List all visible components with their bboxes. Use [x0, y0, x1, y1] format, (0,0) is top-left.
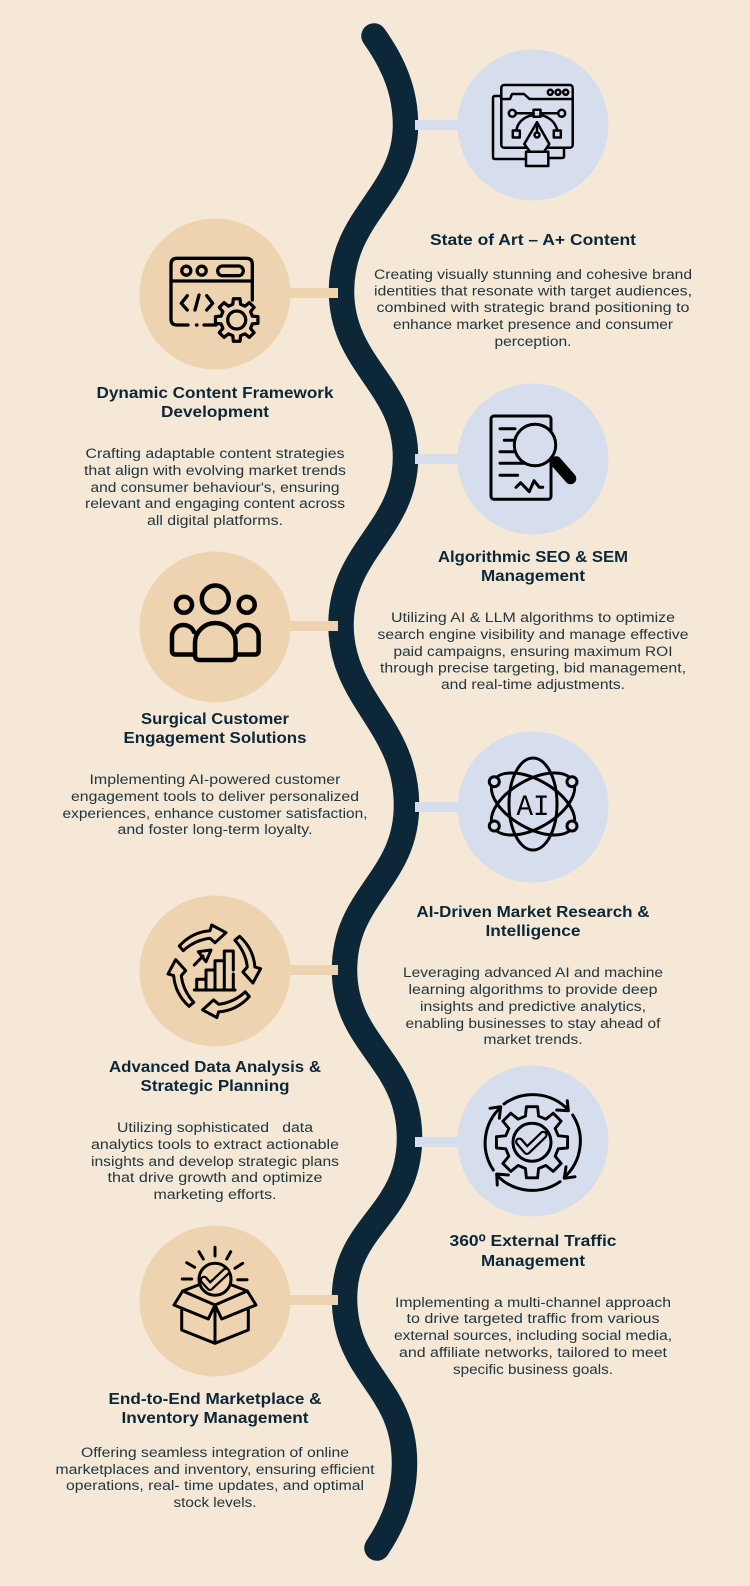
icon circle	[140, 552, 290, 702]
heading: Inventory Management	[122, 1410, 308, 1427]
body text: paid campaigns, ensuring maximum ROI	[394, 644, 672, 659]
body text: learning algorithms to provide deep	[408, 982, 658, 997]
heading: Management	[481, 1253, 585, 1270]
body text: to drive targeted traffic from various	[406, 1311, 660, 1326]
icon: gear with check and cycle arrows	[485, 1095, 580, 1190]
heading: Engagement Solutions	[124, 730, 306, 747]
heading: Management	[481, 568, 585, 585]
body text: Offering seamless integration of online	[81, 1445, 349, 1460]
body text: Utilizing sophisticated data	[117, 1120, 314, 1135]
heading: Advanced Data Analysis &	[109, 1059, 321, 1076]
body text: enabling businesses to stay ahead of	[406, 1016, 661, 1031]
heading: State of Art – A+ Content	[430, 232, 636, 249]
body text: and foster long-term loyalty.	[118, 822, 312, 837]
panel: Surgical Customer Engagement	[62, 552, 368, 837]
panel: Algorithmic SEO and SEM	[378, 384, 688, 692]
connector	[289, 621, 338, 631]
heading: Development	[161, 404, 269, 421]
panel: Advanced Data Analysis	[91, 896, 339, 1202]
connector	[415, 802, 459, 812]
heading	[438, 549, 628, 585]
body text: Leveraging advanced AI and machine	[403, 965, 663, 980]
icon: open box with check badge	[174, 1247, 256, 1343]
body text: Utilizing AI & LLM algorithms to optimize	[391, 610, 675, 625]
body text: that align with evolving market trends	[84, 463, 346, 478]
connector	[415, 454, 459, 464]
body text: Implementing AI-powered customer	[90, 772, 341, 787]
heading	[450, 1233, 617, 1270]
icon circle	[458, 732, 608, 882]
body text: perception.	[494, 334, 572, 349]
connector	[415, 1137, 459, 1147]
heading: End-to-End Marketplace &	[108, 1391, 322, 1408]
body text: and affiliate networks, tailored to meet	[399, 1345, 667, 1360]
body text: all digital platforms.	[147, 513, 283, 528]
body text	[394, 1295, 672, 1377]
body text	[378, 610, 688, 692]
icon: AI atom	[481, 758, 585, 850]
heading: 360⁰ External Traffic	[450, 1233, 617, 1250]
heading: Surgical Customer	[141, 711, 289, 728]
heading	[124, 711, 306, 747]
icon: AI atom: AI	[516, 791, 550, 825]
body text: search engine visibility and manage effective	[378, 627, 688, 642]
icon: group of people	[172, 586, 259, 660]
connector	[289, 288, 338, 298]
body text: and real-time adjustments.	[441, 677, 625, 692]
body text: Creating visually stunning and cohesive brand	[374, 267, 692, 282]
body text: that drive growth and optimize	[108, 1170, 322, 1185]
body text	[91, 1120, 339, 1202]
body text	[84, 446, 346, 528]
panel: Dynamic Content Framework	[84, 218, 346, 528]
heading: Algorithmic SEO & SEM	[438, 549, 628, 566]
icon circle	[140, 896, 290, 1046]
body text: enhance market presence and consumer	[393, 317, 674, 332]
body text: stock levels.	[174, 1495, 256, 1510]
connector	[289, 965, 338, 975]
icon circle	[140, 1226, 290, 1376]
timeline wave	[341, 36, 410, 1548]
body text: marketplaces and inventory, ensuring efficient	[56, 1462, 375, 1477]
body text: operations, real- time updates, and optimal	[66, 1478, 364, 1493]
panel: End-to-End Marketplace	[56, 1226, 375, 1510]
body text	[56, 1445, 375, 1510]
icon circle	[140, 218, 290, 370]
panel: AI-Driven Market Research	[403, 732, 663, 1047]
body text	[374, 267, 692, 349]
icon: growth chart with cycle arrows	[168, 925, 261, 1018]
heading: AI-Driven Market Research &	[416, 904, 650, 921]
icon: document with magnifier	[491, 416, 570, 499]
heading: Dynamic Content Framework	[96, 385, 334, 402]
heading: Strategic Planning	[140, 1078, 290, 1095]
icon: design window with pen tool	[493, 85, 573, 166]
body text: and consumer behaviour's, ensuring	[90, 480, 340, 495]
body text: insights and develop strategic plans	[91, 1154, 339, 1169]
body text	[62, 772, 368, 837]
heading	[109, 1059, 321, 1095]
heading	[416, 904, 650, 940]
body text: insights and predictive analytics,	[420, 999, 646, 1014]
icon circle	[458, 50, 608, 200]
body text: marketing efforts.	[154, 1187, 276, 1202]
icon circle	[458, 1066, 608, 1216]
connector	[289, 1295, 338, 1305]
body text: market trends.	[484, 1032, 582, 1047]
body text: relevant and engaging content across	[85, 496, 345, 511]
body text: analytics tools to extract actionable	[91, 1137, 339, 1152]
panel: 360 External Traffic	[394, 1066, 672, 1377]
panel: State of Art	[374, 50, 692, 349]
body text: specific business goals.	[453, 1362, 613, 1377]
icon circle	[458, 384, 608, 534]
body text: combined with strategic brand positioning to	[376, 300, 690, 315]
connector	[415, 120, 459, 130]
body text: through precise targeting, bid management,	[380, 660, 686, 676]
icon: code window with gear	[171, 258, 258, 341]
body text	[403, 965, 663, 1047]
body text: engagement tools to deliver personalized	[71, 789, 359, 804]
body text: experiences, enhance customer satisfaction,	[62, 806, 368, 821]
body text: Crafting adaptable content strategies	[86, 446, 345, 461]
heading	[108, 1391, 322, 1427]
body text: identities that resonate with target audiences,	[374, 284, 692, 298]
body text: external sources, including social media,	[394, 1328, 672, 1343]
heading: Intelligence	[486, 923, 581, 940]
heading	[96, 385, 334, 421]
body text: Implementing a multi-channel approach	[395, 1295, 671, 1310]
